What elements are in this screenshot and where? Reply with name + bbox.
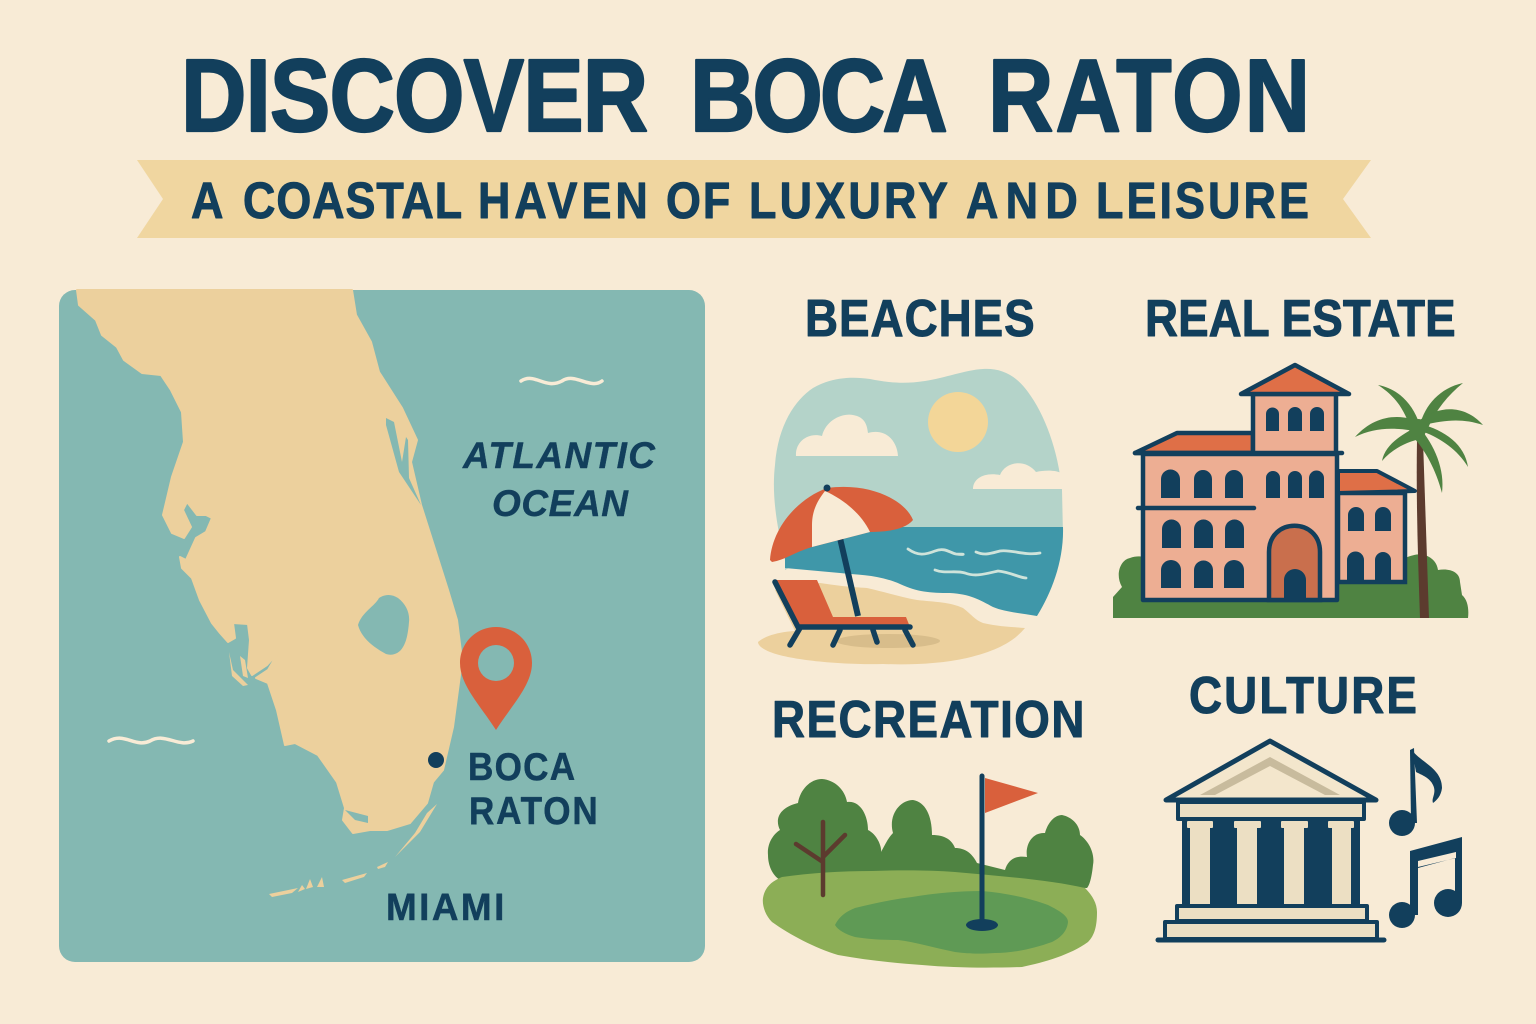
ocean label <box>462 435 656 524</box>
hedge <box>1113 554 1468 618</box>
fairway <box>763 870 1097 968</box>
ribbon subtitle: AND <box>966 173 1078 230</box>
label miami: MIAMI <box>386 885 504 928</box>
ribbon subtitle: LEISURE <box>1096 173 1309 230</box>
cloud right <box>973 463 1063 489</box>
title <box>181 38 1310 153</box>
location pin <box>460 627 532 730</box>
sea <box>785 527 1063 616</box>
palm <box>1355 383 1483 618</box>
trees <box>768 779 1093 888</box>
southwest inlets <box>229 652 248 686</box>
putting green <box>835 891 1068 954</box>
ribbon subtitle: COASTAL <box>243 173 462 230</box>
beach chair <box>775 580 913 645</box>
icon: golf course <box>763 776 1097 968</box>
heading: beaches: BEACHES <box>805 290 1035 348</box>
city dot <box>428 752 444 768</box>
flag <box>966 776 1038 931</box>
title: DISCOVER <box>181 38 648 153</box>
heading: culture: CULTURE <box>1189 667 1417 725</box>
ribbon subtitle: LUXURY <box>749 173 948 230</box>
ocean label: OCEAN <box>492 483 629 524</box>
east lagoon <box>386 418 421 505</box>
label boca raton <box>468 744 598 832</box>
icon: beach scene <box>758 369 1063 664</box>
cloud left <box>796 415 898 456</box>
ribbon subtitle: HAVEN <box>478 173 648 230</box>
windows <box>1161 407 1391 588</box>
florida keys <box>269 804 437 897</box>
icon: mansion <box>1113 365 1483 618</box>
sand <box>758 583 1025 664</box>
sky <box>774 369 1063 570</box>
icon: music notes <box>1389 748 1462 928</box>
arched door <box>1269 526 1320 600</box>
panel: map <box>59 290 705 962</box>
florida land <box>77 290 462 833</box>
main block <box>1143 454 1337 600</box>
tower <box>1253 394 1336 453</box>
sea waves <box>908 549 1040 578</box>
label boca raton: RATON <box>469 788 598 832</box>
heading: recreation: RECREATION <box>772 691 1084 749</box>
lake okeechobee <box>358 595 409 655</box>
ribbon subtitle <box>137 160 1371 238</box>
wave left <box>109 738 193 743</box>
heading: real estate: REAL ESTATE <box>1145 290 1456 348</box>
sun <box>928 392 988 452</box>
tree trunk <box>796 822 845 895</box>
ribbon subtitle: A <box>191 173 223 230</box>
icon: museum <box>1158 741 1384 940</box>
tip lagoon <box>345 810 368 823</box>
title: RATON <box>988 38 1310 153</box>
chair shadow <box>836 634 940 648</box>
umbrella <box>770 484 913 616</box>
wave top <box>521 378 602 384</box>
ribbon subtitle: OF <box>666 173 730 230</box>
ocean label: ATLANTIC <box>462 435 656 476</box>
title: BOCA <box>690 38 948 153</box>
right wing <box>1338 493 1405 582</box>
left roof <box>1135 433 1253 453</box>
label boca raton: BOCA <box>468 744 575 788</box>
